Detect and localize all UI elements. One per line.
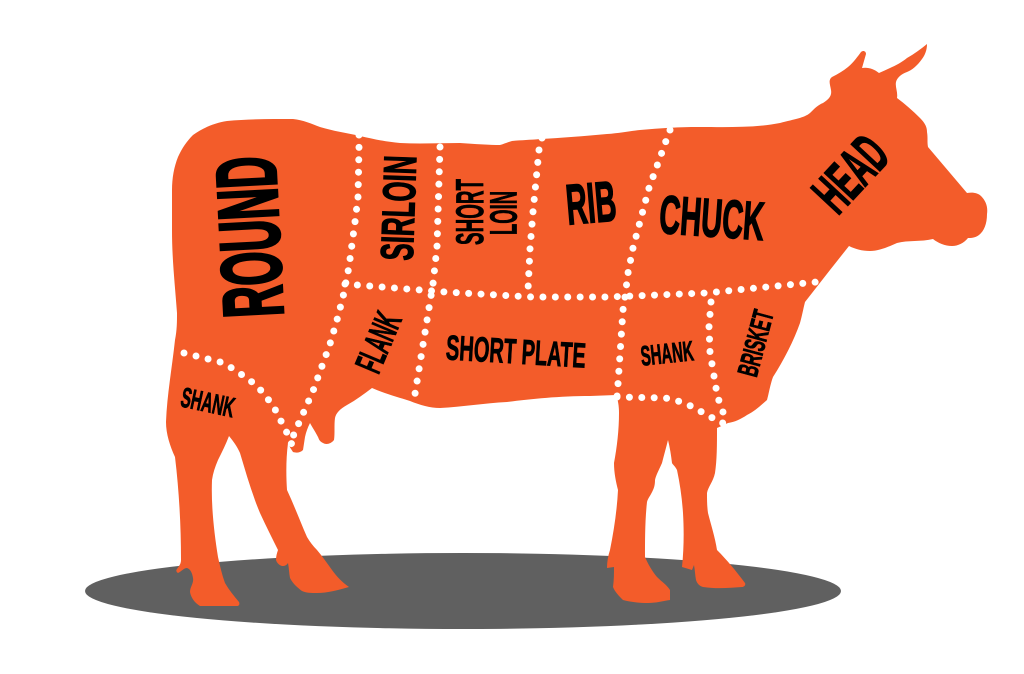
cow silhouette <box>166 44 987 606</box>
dotted line: middle horizontal <box>345 282 817 297</box>
label: fore shank: SHANK <box>639 335 695 372</box>
dotted line: short loin left and short plate left <box>415 147 440 394</box>
dotted line: foreleg top <box>617 397 728 423</box>
label: flank: FLANK <box>348 306 411 379</box>
dotted line: sirloin left and flank left <box>291 135 359 441</box>
label: brisket: BRISKET <box>732 307 781 380</box>
label: short plate: SHORT PLATE <box>445 328 587 376</box>
label: round: ROUND <box>199 154 302 320</box>
dotted line: rear shank <box>184 353 292 445</box>
dotted line: brisket left <box>709 302 723 423</box>
label: rib: RIB <box>563 169 619 238</box>
label: rear shank: SHANK <box>178 382 238 423</box>
dotted line: rib left <box>528 138 542 290</box>
dotted line: chuck left and shank left <box>617 130 670 397</box>
cow: SHORT <box>449 179 492 245</box>
label: head: HEAD <box>800 123 902 225</box>
cow <box>166 44 987 606</box>
label: chuck: CHUCK <box>657 185 766 252</box>
cow: LOIN <box>484 191 526 235</box>
ground shadow ellipse <box>85 553 841 629</box>
label: sirloin: SIRLOIN <box>371 155 426 261</box>
